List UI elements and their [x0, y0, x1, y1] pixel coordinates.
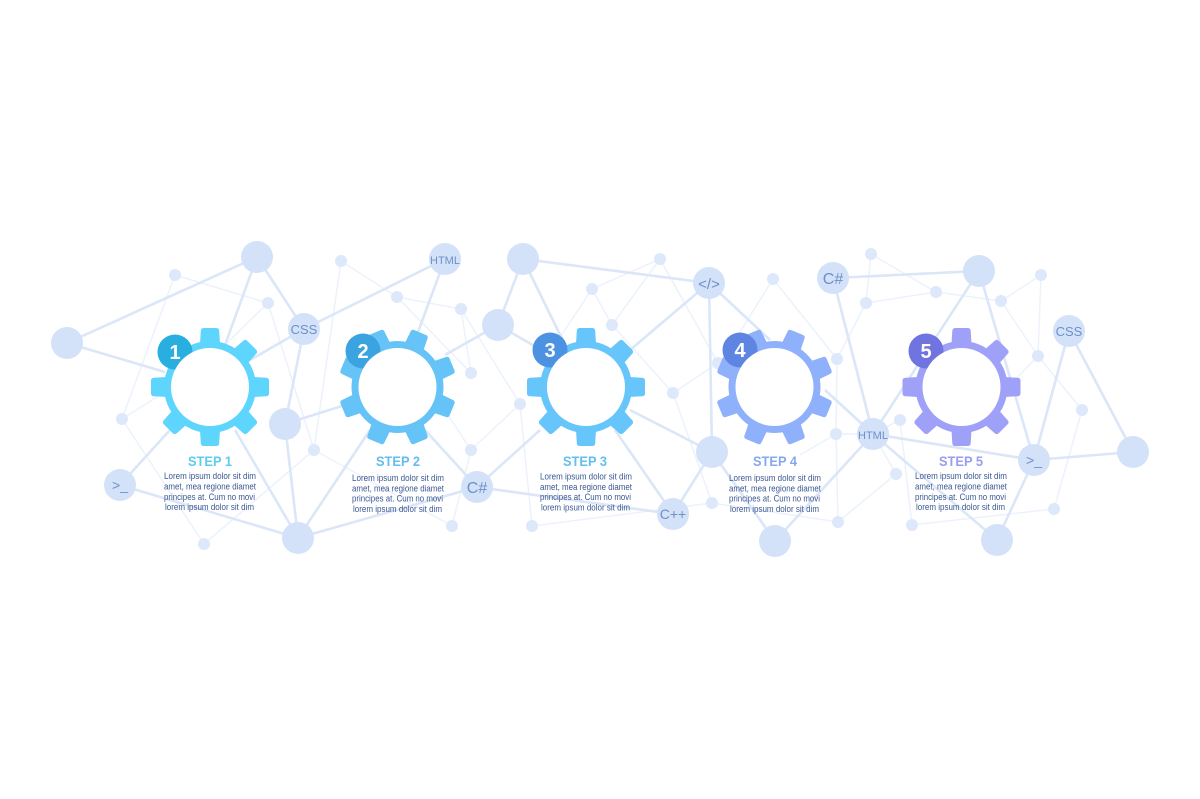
text block: step 4: lorem ipsum dolor sit dim — [730, 504, 819, 514]
text block: step 5: Lorem ipsum dolor sit dim — [915, 471, 1007, 481]
icon: gear 3: 3 — [544, 340, 556, 362]
code labels on nodes: >_ — [1026, 452, 1042, 468]
step 3 — [527, 328, 645, 512]
heading: step 3: STEP 3 — [563, 453, 607, 469]
code labels on nodes: HTML — [430, 255, 460, 267]
text block: step 3: lorem ipsum dolor sit dim — [541, 502, 630, 512]
thick connecting lines — [67, 257, 1133, 541]
text block: step 1: amet, mea regione diamet — [164, 482, 256, 492]
text block: step 2: Lorem ipsum dolor sit dim — [352, 473, 444, 483]
text block: step 4: Lorem ipsum dolor sit dim — [729, 473, 821, 483]
step 1 — [151, 328, 269, 512]
icon: gear 5 — [902, 328, 1020, 446]
icon: gear 2: 2 — [357, 341, 369, 363]
heading: step 5: STEP 5 — [939, 453, 983, 469]
icon: gear 1: 1 — [169, 342, 181, 364]
text block: step 2: lorem ipsum dolor sit dim — [353, 504, 442, 514]
step 2 — [320, 310, 475, 514]
code labels on nodes: CSS — [291, 322, 318, 337]
text block: step 1 — [164, 471, 256, 512]
code labels on nodes: C# — [823, 271, 843, 288]
step 4 — [697, 310, 852, 514]
icon: gear 1 — [151, 328, 269, 446]
step 5 — [902, 328, 1020, 512]
code labels on nodes: C# — [467, 480, 487, 497]
icon: gear 4 — [697, 310, 852, 464]
heading: step 1: STEP 1 — [188, 453, 232, 469]
text block: step 2 — [352, 473, 444, 514]
text block: step 2: amet, mea regione diamet — [352, 484, 444, 494]
text block: step 3: Lorem ipsum dolor sit dim — [540, 472, 632, 482]
text block: step 3: principes at. Cum no movi — [540, 492, 631, 502]
text block: step 5 — [915, 471, 1007, 512]
heading: step 4: STEP 4 — [753, 453, 797, 469]
text block: step 2: principes at. Cum no movi — [352, 494, 443, 504]
icon: gear 5: 5 — [920, 341, 932, 363]
text block: step 3 — [540, 472, 632, 512]
icon: gear 2 — [320, 310, 475, 464]
network background — [51, 241, 1149, 557]
text block: step 5: lorem ipsum dolor sit dim — [916, 502, 1005, 512]
text block: step 1: principes at. Cum no movi — [164, 492, 255, 502]
small network nodes — [116, 248, 1088, 550]
code labels on nodes: </> — [698, 276, 720, 293]
text block: step 5: amet, mea regione diamet — [915, 482, 1007, 492]
text block: step 1: Lorem ipsum dolor sit dim — [164, 471, 256, 481]
code labels on nodes: >_ — [112, 477, 128, 493]
text block: step 4 — [729, 473, 821, 514]
text block: step 3: amet, mea regione diamet — [540, 482, 632, 492]
heading: step 2: STEP 2 — [376, 453, 420, 469]
large network nodes — [51, 241, 1149, 557]
thin connecting lines — [122, 254, 1082, 544]
icon: gear 4: 4 — [734, 340, 746, 362]
code labels on nodes — [112, 255, 1083, 522]
text block: step 4: amet, mea regione diamet — [729, 484, 821, 494]
text block: step 1: lorem ipsum dolor sit dim — [165, 502, 254, 512]
text block: step 5: principes at. Cum no movi — [915, 492, 1006, 502]
icon: gear 3 — [527, 328, 645, 446]
code labels on nodes: CSS — [1056, 324, 1083, 339]
code labels on nodes: HTML — [858, 430, 888, 442]
code labels on nodes: C++ — [660, 506, 686, 522]
text block: step 4: principes at. Cum no movi — [729, 494, 820, 504]
